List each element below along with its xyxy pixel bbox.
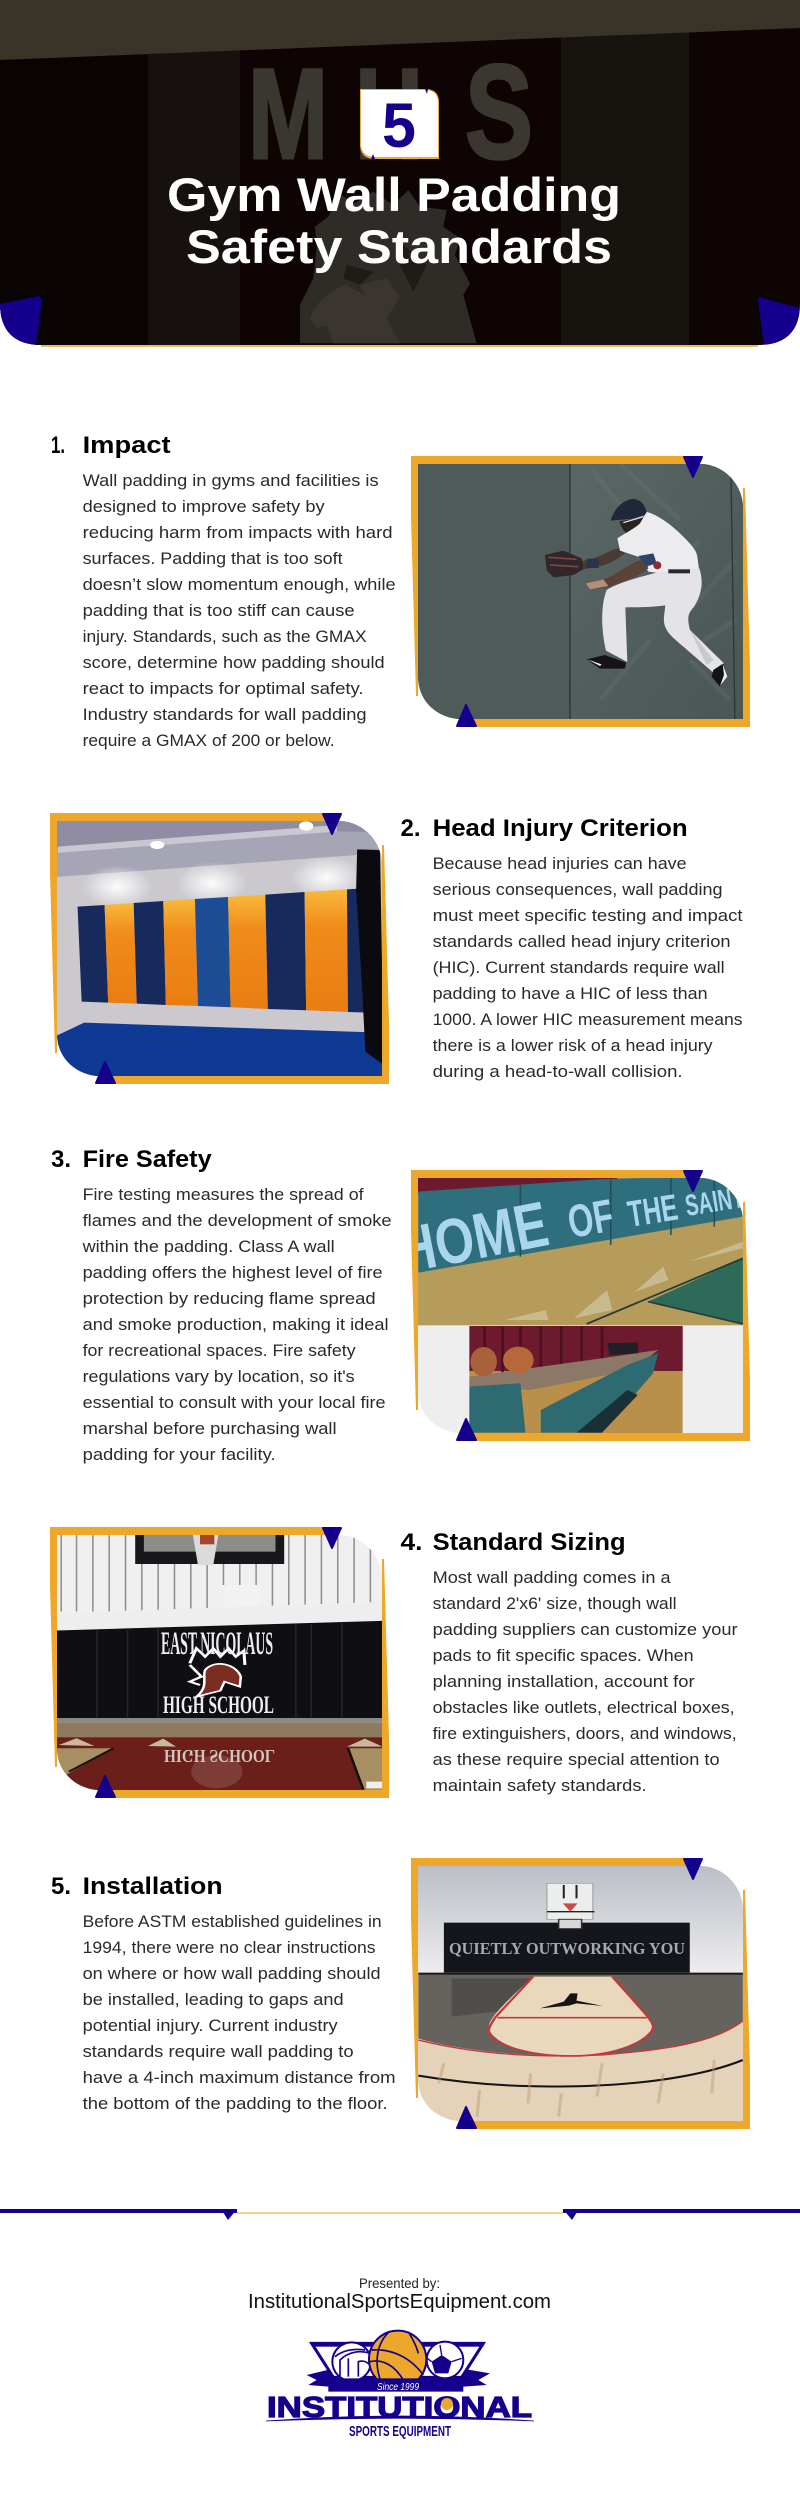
body: impact: require a GMAX of 200 or below. [83,732,335,750]
wall letters: M [248,43,328,186]
heading: standard sizing: Standard Sizing [433,1529,626,1556]
body: standard sizing: obstacles like outlets, electrical boxes, [433,1699,735,1717]
body: fire safety: regulations vary by location, so it's [83,1368,355,1386]
heading: head injury criterion: Head Injury Criterion [433,815,688,842]
footer divider [0,2209,800,2220]
body: head injury criterion: Because head injuries can have [433,855,687,873]
wall lettering: THE [625,1187,681,1235]
blue marker top [323,1528,341,1548]
pants [602,568,724,673]
photo panel: east nicolaus high school padding [50,1527,389,1804]
body: impact: reducing harm from impacts with hard [83,524,393,542]
photo panel: home of the saints padding [393,1170,759,1441]
body: fire safety: Fire testing measures the spread of [83,1186,364,1204]
body: installation: on where or how wall padding should [83,1965,381,1983]
heading: head injury criterion: 2. [400,815,420,842]
body: head injury criterion: serious consequences, wall padding [433,881,723,899]
body: installation: 1994, there were no clear instructions [83,1939,376,1957]
body: fire safety: padding offers the highest level of fire [83,1264,383,1282]
blue marker bottom [96,1062,115,1083]
title: Safety Standards [186,220,612,273]
school mascot helmet [190,1648,245,1665]
body: installation: the bottom of the padding to the floor. [83,2095,388,2113]
body: impact: Industry standards for wall padding [83,706,367,724]
body: impact: doesn’t slow momentum enough, while [83,576,396,594]
gold underline [41,345,758,347]
body: head injury criterion: must meet specific testing and impact [433,907,743,925]
body: head injury criterion: standards called head injury criterion [433,933,731,951]
heading: fire safety: 3. [51,1146,71,1173]
jumpman silhouette [540,1993,603,2008]
body: fire safety: and smoke production, making it ideal [83,1316,389,1334]
soccer ball [427,2342,463,2378]
section 4: standard sizing text [400,1529,738,1795]
number badge [360,89,439,161]
body: head injury criterion: there is a lower risk of a head injury [433,1037,713,1055]
section 1: impact text [51,432,396,750]
hat and face [619,516,644,533]
lion mascot [300,190,477,343]
since 1999: Since 1999 [377,2381,419,2393]
wall letters: H [355,43,423,186]
title: Gym Wall Padding [167,168,621,221]
heading: impact: 1. [51,432,65,459]
wordmark: INSTITUTIONAL [267,2392,532,2424]
body: installation: standards require wall padding to [83,2043,354,2061]
wall slogan: QUIETLY OUTWORKING YOU [449,1939,685,1958]
wall lettering: HOME [393,1187,554,1287]
jersey [617,512,699,575]
school name: HIGH SCHOOL [164,1746,275,1766]
cleats [587,655,626,669]
presented by: Presented by: [359,2276,440,2291]
school name: HIGH SCHOOL [163,1692,274,1719]
title [167,168,621,273]
body: fire safety [82,1186,392,1464]
body: head injury criterion: (HIC). Current standards require wall [433,959,725,977]
number badge: 5 [382,91,416,161]
glove [545,551,585,577]
body: impact: Wall padding in gyms and facilities is [83,472,379,490]
near arm [587,559,648,589]
body: standard sizing: as these require special attention to [433,1751,720,1769]
body: impact: injury. Standards, such as the GMAX [83,628,367,646]
body: standard sizing: fire extinguishers, doors, and windows, [433,1725,737,1743]
body: standard sizing [433,1569,738,1795]
school name [161,1626,275,1766]
body: impact: react to impacts for optimal safety. [83,680,364,698]
basketball [369,2331,426,2388]
wall lettering: SAINTS [683,1179,759,1223]
section 2: head injury criterion text [400,815,743,1081]
far arm [583,548,625,569]
corner accents [0,296,800,345]
body: fire safety: within the padding. Class A wall [82,1238,335,1256]
body: fire safety: padding for your facility. [83,1446,276,1464]
body: fire safety: essential to consult with your local fire [83,1394,386,1412]
volleyball [332,2342,371,2381]
body: head injury criterion: 1000. A lower HIC measurement means [433,1011,743,1029]
blue marker top [684,1171,702,1191]
body: fire safety: marshal before purchasing wall [83,1420,337,1438]
section 3: fire safety text [51,1146,392,1464]
heading: fire safety: Fire Safety [83,1146,212,1173]
photo panel: private basketball court [411,1858,750,2129]
header banner [0,0,800,347]
body: installation: Before ASTM established guidelines in [83,1913,382,1931]
blue marker bottom [457,705,476,726]
body: installation: be installed, leading to gaps and [83,1991,344,2009]
wall lettering: OF [564,1189,617,1248]
ribbon [307,2369,490,2392]
body: standard sizing: planning installation, account for [433,1673,695,1691]
heading: installation: 5. [51,1873,71,1900]
blue marker bottom [96,1776,115,1797]
blue marker top [323,814,341,834]
body: standard sizing: maintain safety standards. [433,1777,647,1795]
body: standard sizing: padding suppliers can customize your [433,1621,738,1639]
body: impact: surfaces. Padding that is too soft [83,550,343,568]
body: impact: padding that is too stiff can cause [83,602,355,620]
body: head injury criterion [433,855,743,1081]
body: impact: designed to improve safety by [83,498,325,516]
wall lettering [418,1188,740,1268]
tagline: SPORTS EQUIPMENT [349,2423,451,2440]
logo: institutional sports equipment [266,2331,534,2440]
body: fire safety: for recreational spaces. Fire safety [83,1342,356,1360]
heading: impact: Impact [83,432,171,459]
presented by: InstitutionalSportsEquipment.com [248,2291,551,2313]
wall letters: S [465,38,533,187]
body: standard sizing: pads to fit specific spaces. When [433,1647,694,1665]
body: impact: score, determine how padding should [83,654,385,672]
heading: installation: Installation [83,1873,223,1900]
body: impact [83,472,396,750]
body: installation [83,1913,396,2113]
heading: standard sizing: 4. [400,1529,422,1556]
presented by [248,2276,551,2313]
blue marker top [684,1859,702,1879]
body: installation: have a 4-inch maximum distance from [83,2069,396,2087]
body: standard sizing: standard 2'x6' size, though wall [433,1595,677,1613]
heading: impact [51,432,171,459]
section 5: installation text [51,1873,396,2113]
blue marker bottom [457,1419,476,1440]
body: installation: potential injury. Current industry [83,2017,338,2035]
blue marker bottom [457,2107,476,2128]
photo panel: east nicolaus high school padding: EAST NICOLAUS [161,1626,273,1662]
blue marker top [684,457,702,477]
body: fire safety: flames and the development of smoke [83,1212,392,1230]
photo panel: orange and navy padded wall [50,813,389,1090]
wall letters [253,62,530,161]
photo panel: outfielder on wall padding [411,456,750,727]
body: fire safety: protection by reducing flame spread [83,1290,376,1308]
body: head injury criterion: padding to have a HIC of less than [433,985,708,1003]
body: standard sizing: Most wall padding comes in a [433,1569,671,1587]
body: head injury criterion: during a head-to-wall collision. [433,1063,683,1081]
